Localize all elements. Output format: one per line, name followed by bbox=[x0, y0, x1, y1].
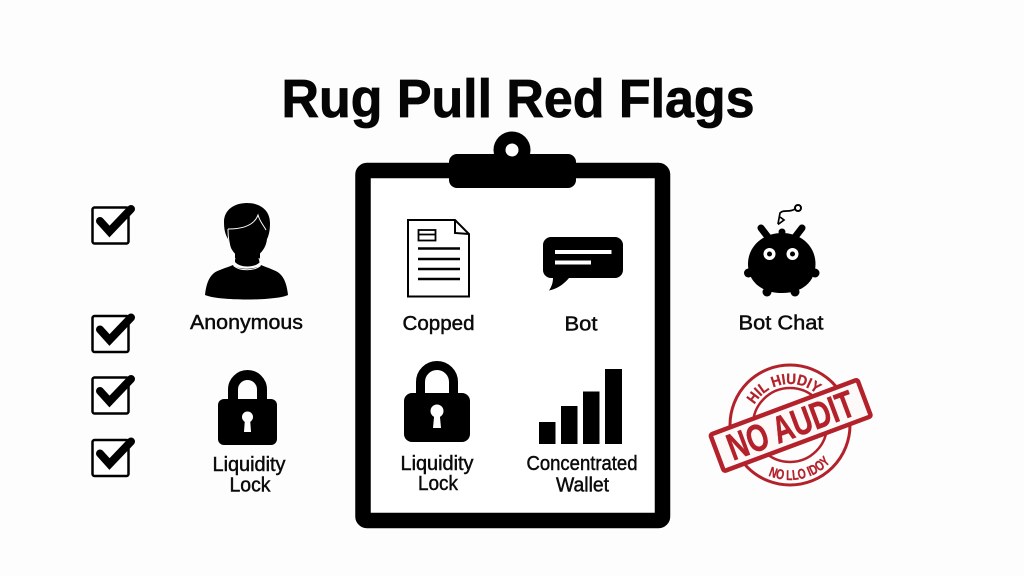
icon: anonymous person bbox=[205, 203, 288, 300]
icon: bot creature bbox=[744, 205, 820, 296]
checkbox 2 bbox=[92, 316, 131, 352]
label: Concentrated Wallet bbox=[526, 453, 638, 496]
icon: padlock centre bbox=[404, 366, 470, 442]
banner bbox=[710, 379, 872, 474]
icon: copied document bbox=[408, 220, 469, 296]
label: Liquidity Lock left: Lock bbox=[230, 474, 271, 496]
checkbox 3 bbox=[92, 378, 131, 414]
label: Liquidity Lock centre bbox=[400, 453, 474, 495]
label: Bot: Bot bbox=[564, 314, 598, 336]
icon: padlock left bbox=[218, 375, 277, 445]
checkbox 4 bbox=[92, 440, 131, 476]
clipboard panel bbox=[363, 132, 662, 520]
label: Copped: Copped bbox=[402, 313, 474, 335]
label: Liquidity Lock centre: Lock bbox=[418, 473, 459, 495]
label: Bot Chat: Bot Chat bbox=[738, 312, 824, 334]
checkbox 1 bbox=[92, 208, 131, 244]
icon: chat bubble bbox=[543, 237, 623, 290]
label: Anonymous: Anonymous bbox=[190, 312, 303, 334]
label: Concentrated Wallet: Wallet bbox=[556, 474, 609, 496]
label: Concentrated Wallet: Concentrated bbox=[526, 453, 638, 475]
title: Rug Pull Red Flags bbox=[282, 69, 754, 129]
stamp: no audit: HIL HIUDIY bbox=[746, 373, 822, 404]
label: Liquidity Lock centre: Liquidity bbox=[400, 453, 474, 475]
stamp: no audit: NO LLO IDOY bbox=[768, 455, 829, 480]
label: Liquidity Lock left: Liquidity bbox=[212, 454, 286, 476]
label: Liquidity Lock left bbox=[212, 454, 286, 496]
banner: NO AUDIT bbox=[721, 383, 861, 469]
stamp: no audit bbox=[708, 364, 873, 486]
icon: bar chart bbox=[539, 369, 622, 444]
